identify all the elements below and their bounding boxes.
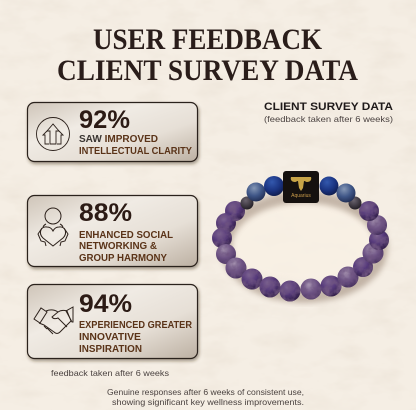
label: saw improved intellectual clarity	[79, 134, 192, 157]
bottom note: Genuine responses after 6 weeks of consistent use,	[107, 387, 304, 397]
title: CLIENT SURVEY DATA	[57, 54, 358, 87]
Aquarius charm: Aquarius	[291, 193, 311, 199]
panel: 88% social networking	[28, 196, 198, 266]
amethyst beads	[212, 201, 389, 302]
heading: client survey data: CLIENT SURVEY DATA	[264, 101, 393, 113]
label: enhanced social networking and group harmony: GROUP HARMONY	[79, 253, 167, 264]
label: enhanced social networking and group harmony: NETWORKING &	[79, 241, 157, 252]
label: saw improved intellectual clarity: SAW IMPROVED	[79, 134, 158, 145]
lapis beads	[246, 176, 356, 202]
label: experienced greater innovative inspiration: INSPIRATION	[79, 344, 142, 355]
icon: arrows in circle	[36, 118, 70, 150]
Aquarius charm	[283, 171, 319, 203]
bracelet photo	[212, 171, 389, 302]
heading: client survey data	[264, 101, 393, 124]
icon: gold zodiac glyph	[291, 177, 311, 191]
icon: handshake	[34, 307, 73, 334]
label: experienced greater innovative inspiration: EXPERIENCED GREATER	[79, 320, 193, 331]
bottom note	[107, 387, 304, 407]
dark spacer beads	[240, 196, 362, 210]
label: saw improved intellectual clarity: INTELLECTUAL CLARITY	[79, 146, 192, 157]
icon: person holding heart	[38, 208, 68, 246]
stat: 88%: 88%	[79, 199, 132, 227]
label: enhanced social networking and group harmony: ENHANCED SOCIAL	[79, 230, 173, 241]
stat: 94%: 94%	[79, 290, 132, 318]
panel: 94% innovative inspiration	[28, 284, 198, 358]
stat: 92%: 92%	[79, 106, 130, 134]
panel: 92% intellectual clarity	[28, 102, 198, 162]
title: USER FEEDBACK	[93, 23, 323, 56]
bottom note: showing significant key wellness improvements.	[112, 397, 304, 407]
label: experienced greater innovative inspiration	[79, 320, 193, 355]
label: experienced greater innovative inspiration: INNOVATIVE	[79, 332, 141, 343]
caption: feedback taken: feedback taken after 6 weeks	[51, 368, 169, 378]
label: enhanced social networking and group harmony	[79, 230, 173, 264]
title	[57, 23, 358, 87]
bracelet shadow	[226, 197, 382, 297]
subheading: (feedback taken after 6 weeks)	[264, 114, 393, 124]
